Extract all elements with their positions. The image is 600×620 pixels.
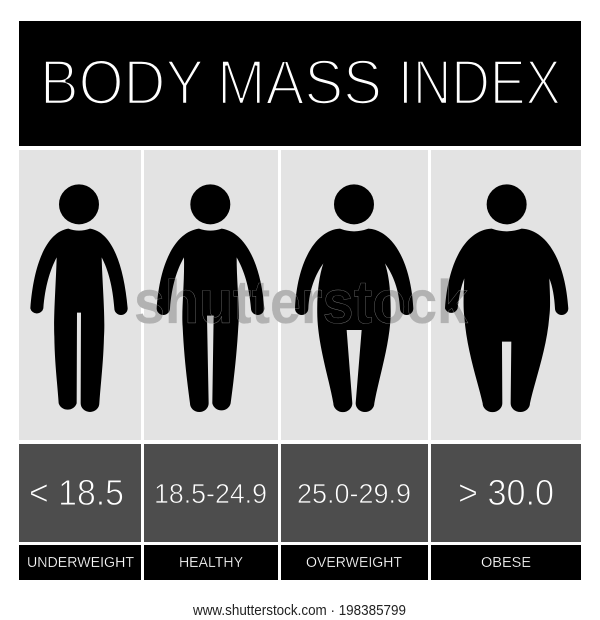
- value box: 25.0-29.9: 25.0-29.9: [297, 478, 411, 509]
- value box: over 30.0: [431, 444, 581, 542]
- value box: under 18.5: < 18.5: [29, 472, 124, 513]
- figure: underweight: [30, 184, 128, 412]
- value box: 18.5-24.9: 18.5-24.9: [154, 478, 267, 509]
- watermark: shutterstock: [134, 268, 468, 336]
- header banner: [19, 21, 581, 146]
- figure: overweight: [295, 184, 413, 412]
- value box: 18.5-24.9: [144, 444, 278, 542]
- title: [40, 48, 561, 118]
- title: BODY: [40, 48, 204, 118]
- label: underweight: UNDERWEIGHT: [27, 555, 134, 571]
- watermark outline: shutterstock: [134, 268, 468, 336]
- figure: obese: [445, 184, 568, 412]
- panel backgrounds: [19, 150, 581, 440]
- value box: over 30.0: > 30.0: [458, 472, 554, 513]
- label: obese: [431, 545, 581, 580]
- figure: healthy: [157, 184, 264, 412]
- value box: 25.0-29.9: [281, 444, 428, 542]
- footer credit: www.shutterstock.com · 198385799: [192, 602, 406, 619]
- label: healthy: HEALTHY: [179, 555, 243, 571]
- label: obese: OBESE: [481, 555, 531, 571]
- label: overweight: [281, 545, 428, 580]
- label: healthy: [144, 545, 278, 580]
- title: INDEX: [398, 48, 561, 118]
- title: MASS: [217, 48, 382, 118]
- value box: under 18.5: [19, 444, 141, 542]
- label: underweight: [19, 545, 141, 580]
- label: overweight: OVERWEIGHT: [306, 555, 402, 571]
